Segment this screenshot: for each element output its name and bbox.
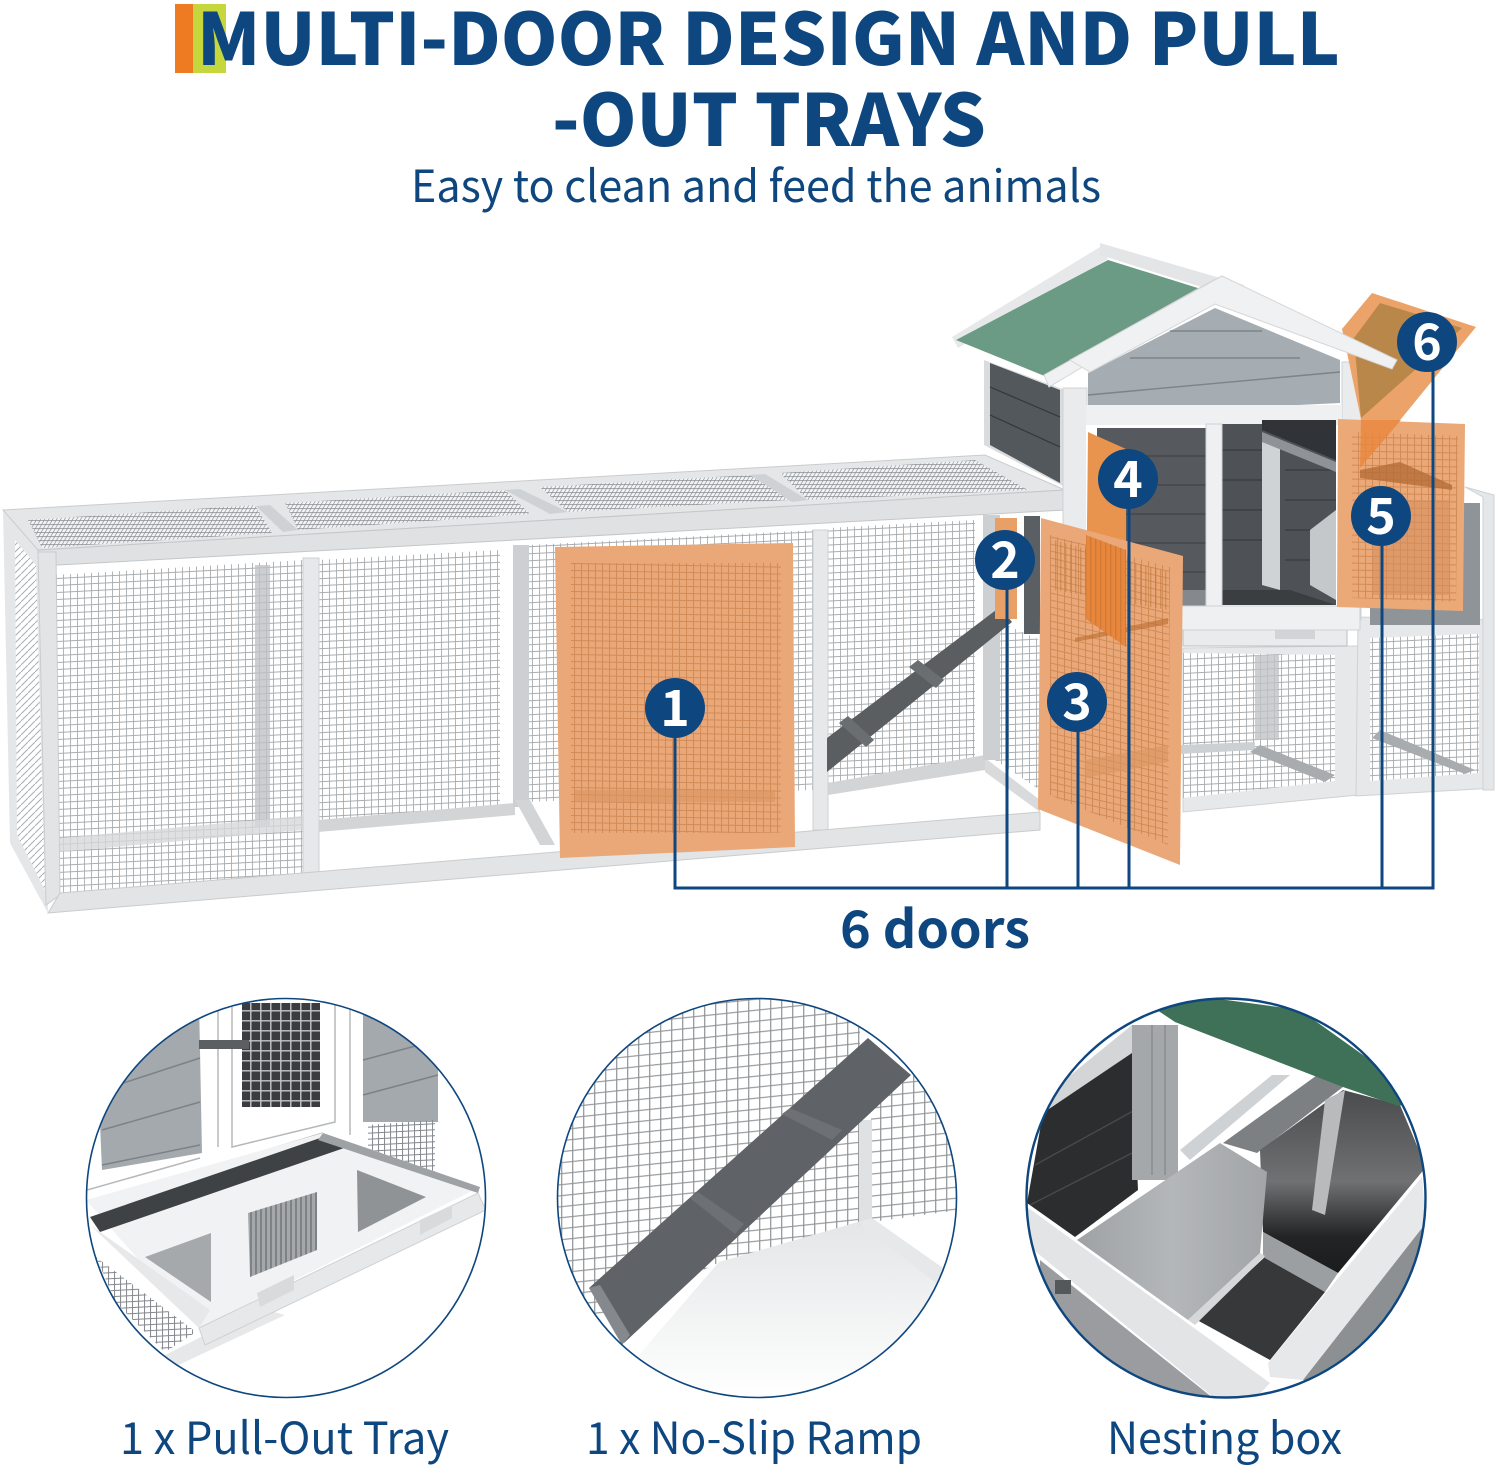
title: [197, 0, 1340, 167]
ramp: [827, 607, 1012, 772]
detail circle: nesting box: [1026, 996, 1426, 1398]
door 6: [1342, 293, 1476, 468]
ramp close-up: [589, 1038, 911, 1345]
green roof: [952, 243, 1244, 387]
detail circle: pull-out tray: [86, 998, 486, 1398]
subtitle: Easy to clean and feed the animals: [411, 151, 1101, 215]
green roof close-up: [1159, 1000, 1402, 1106]
door number badges: [645, 303, 1457, 741]
door number badges: 4: [1113, 440, 1143, 512]
chicken coop illustration: [3, 243, 1494, 913]
caption: pull-out tray: 1 x Pull-Out Tray: [120, 1403, 449, 1467]
title: -OUT TRAYS: [552, 62, 986, 167]
top frame: [3, 455, 1065, 550]
caption: nesting box: Nesting box: [1107, 1403, 1342, 1467]
door 1: [555, 543, 795, 858]
title accent block: [175, 4, 226, 73]
door 3: [1038, 518, 1183, 865]
door number badges: 1: [660, 669, 690, 741]
door number badges: 3: [1062, 663, 1092, 735]
detail circle: no-slip ramp: [557, 998, 960, 1400]
caption: ramp: 1 x No-Slip Ramp: [586, 1403, 922, 1467]
tray: [86, 1133, 486, 1345]
lower nest box section: [1040, 487, 1494, 812]
long run enclosure: [3, 455, 1065, 913]
door 5: [1337, 419, 1465, 611]
door 4: [1086, 432, 1126, 647]
door number badges: 5: [1366, 477, 1396, 549]
door number badges: 6: [1412, 303, 1442, 375]
door overlays: [555, 419, 1465, 865]
door 2: [995, 518, 1017, 619]
posts and floor rails: [38, 552, 60, 905]
doors count label: 6 doors: [840, 888, 1030, 963]
door number badges: 2: [990, 521, 1020, 593]
house gable right eave: [1070, 276, 1397, 372]
door callout lines: [675, 360, 1433, 888]
house body: [984, 308, 1361, 634]
